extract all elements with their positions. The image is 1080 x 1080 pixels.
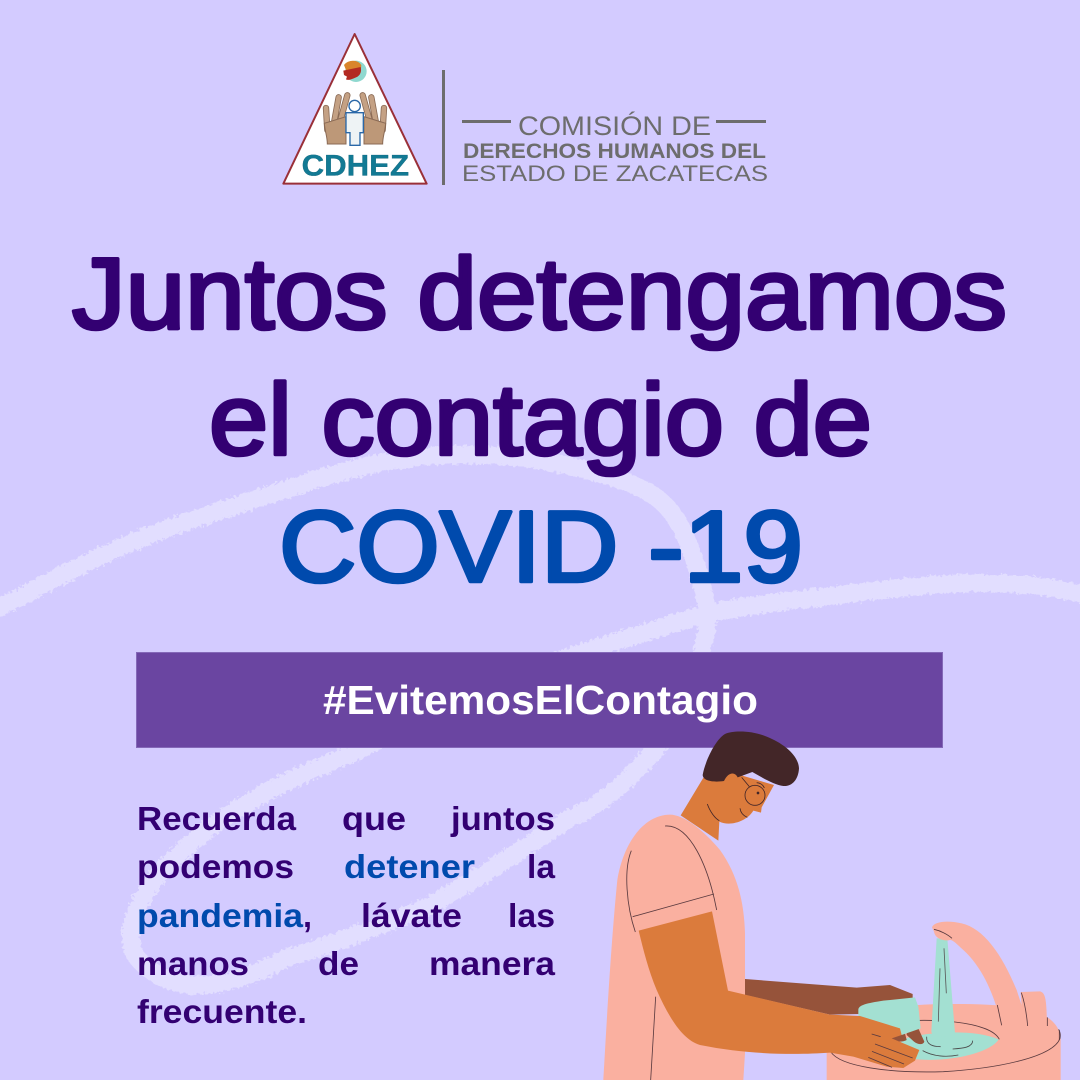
basin water [900,1032,999,1060]
title line 3: COVID -19: COVID -19 [279,492,803,604]
logo divider [442,70,445,185]
body text: manos [137,945,249,982]
body text: juntos [450,800,555,837]
neck and head [681,731,799,841]
logo wordmark: DERECHOS HUMANOS DEL [463,140,766,163]
shirt [603,815,745,1080]
water stream [923,938,973,1056]
body text: pandemia [137,897,304,934]
illustration: person washing hands [603,731,1061,1080]
body text: , [303,897,312,934]
body text: Recuerda [137,800,297,837]
logo triangle emblem [283,34,427,184]
hashtag banner [136,652,942,748]
body text: la [527,848,556,885]
body text: las [508,897,555,934]
body text [137,800,556,1030]
body text: podemos [137,848,294,885]
front arm [639,911,919,1068]
logo wordmark [462,110,768,186]
body text: lávate [361,897,462,934]
title line 2: el contagio de [209,364,872,476]
body text: que [342,800,406,837]
hashtag banner: #EvitemosElContagio [323,677,758,723]
background scribble [0,455,1080,985]
faucet [932,922,1028,1026]
cupped hand with soap foam [858,997,921,1035]
body text: manera [429,945,556,982]
sleeve seams [627,826,717,1080]
title [72,238,1007,604]
body text: frecuente. [137,993,307,1030]
logo triangle emblem: CDHEZ [302,150,409,183]
back arm [745,979,913,1015]
logo wordmark: ESTADO DE ZACATECAS [462,161,768,186]
sink [827,991,1061,1080]
body text: de [318,945,359,982]
glasses and face lines [707,777,765,821]
body text: detener [344,848,475,885]
logo: CDHEZ [283,34,768,186]
logo wordmark: COMISIÓN DE [518,110,711,141]
title line 1: Juntos detengamos [72,238,1007,350]
hair [703,731,799,786]
